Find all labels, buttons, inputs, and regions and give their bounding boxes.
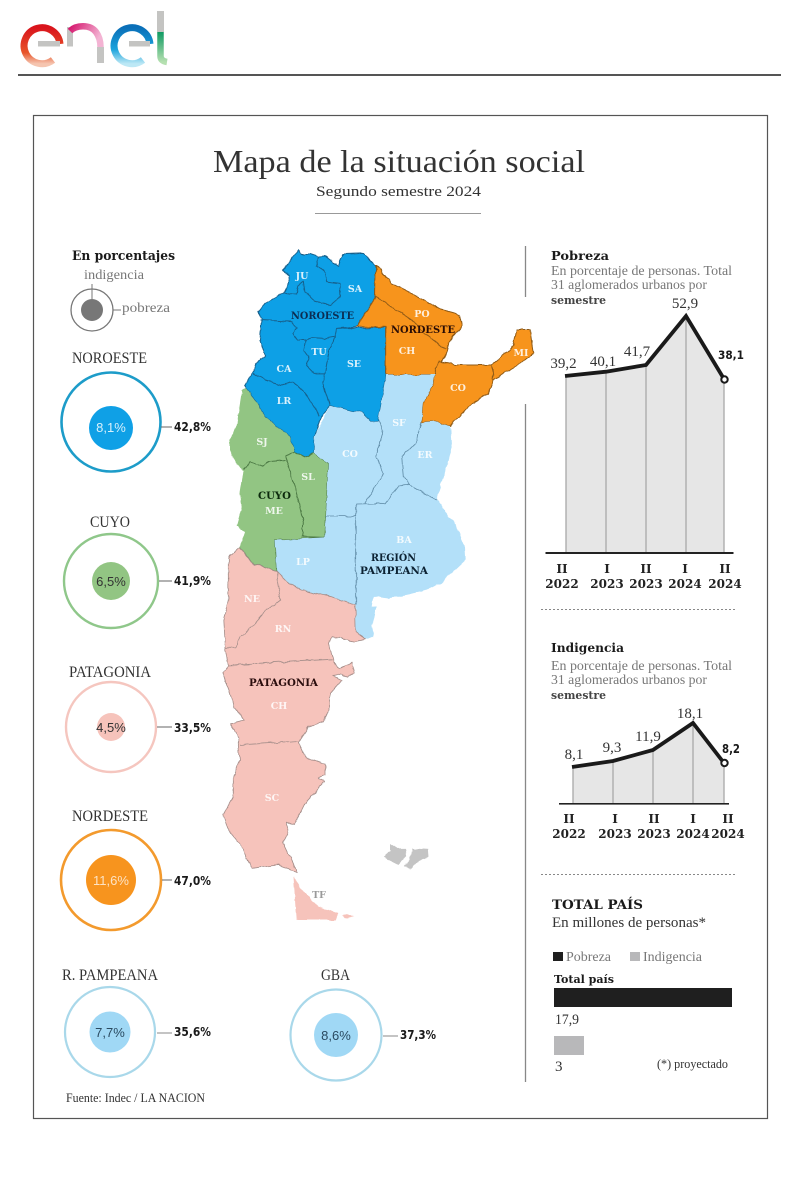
circle: Patagonia: 33,5% — [174, 721, 211, 735]
region names: CUYO — [258, 490, 291, 502]
panel: Total país: (*) proyectado — [657, 1057, 728, 1071]
bar: indigencia — [554, 1036, 584, 1055]
region names: NORDESTE — [391, 324, 455, 336]
panel: Pobreza: En porcentaje de personas. Total — [551, 263, 732, 278]
province labels: SA — [348, 284, 363, 295]
circle: Noroeste: 42,8% — [174, 420, 211, 434]
line chart: indigencia: 2024 — [676, 827, 710, 841]
province labels: CA — [277, 364, 292, 375]
province labels: CH — [271, 701, 287, 712]
circle: Cuyo — [64, 514, 211, 628]
circle: Noroeste: 8,1% — [96, 420, 126, 435]
region names: PATAGONIA — [249, 677, 319, 689]
province labels: LR — [277, 396, 291, 407]
panel: Total país: 17,9 — [555, 1012, 579, 1028]
line chart: pobreza: 2024 — [708, 577, 742, 591]
province labels: SE — [347, 359, 361, 370]
line chart: indigencia: II — [648, 812, 660, 826]
region: Noroeste — [245, 250, 386, 457]
line chart: indigencia — [552, 706, 745, 841]
divider — [541, 608, 735, 610]
title: Mapa de la situación social — [213, 143, 585, 179]
province labels: ME — [265, 506, 283, 517]
region: Nordeste — [357, 265, 533, 426]
province labels: LP — [296, 557, 310, 568]
line chart: pobreza — [545, 296, 744, 591]
province labels: SF — [392, 418, 406, 429]
legend: pobreza / indigencia — [553, 949, 702, 964]
panel: Indigencia — [551, 640, 745, 841]
Islas Malvinas — [383, 844, 429, 868]
region names: NOROESTE — [291, 310, 354, 322]
line chart: pobreza: 38,1 — [718, 348, 744, 362]
panel: Total país: Total país — [554, 972, 614, 986]
region: Cuyo — [230, 388, 328, 572]
line chart: indigencia: II — [563, 812, 575, 826]
circle: Nordeste: NORDESTE — [72, 808, 148, 825]
legend: En porcentajes: En porcentajes — [72, 249, 175, 264]
legend: En porcentajes — [71, 249, 175, 331]
line chart: indigencia: I — [612, 812, 618, 826]
circle: R. Pampeana: 35,6% — [174, 1025, 211, 1039]
line chart: pobreza: 52,9 — [672, 296, 698, 312]
circle: Patagonia: 4,5% — [96, 720, 126, 735]
region names: PAMPEANA — [360, 565, 429, 577]
circle: GBA: 8,6% — [321, 1028, 351, 1043]
panel: Pobreza: 31 aglomerados urbanos por — [551, 277, 708, 292]
subtitle: Segundo semestre 2024 — [316, 184, 482, 200]
panel: Pobreza: Pobreza — [551, 248, 609, 263]
line chart: pobreza: II — [556, 562, 568, 576]
circle: Cuyo: 41,9% — [174, 574, 211, 588]
line chart: indigencia: 2023 — [598, 827, 632, 841]
panel: Indigencia: semestre — [551, 689, 606, 702]
subtitle rule — [315, 212, 481, 214]
legend: En porcentajes: pobreza — [122, 300, 170, 315]
circle: GBA: GBA — [321, 967, 350, 984]
province labels: CH — [399, 346, 415, 357]
line chart: indigencia: 8,2 — [722, 742, 740, 756]
province labels: SL — [301, 472, 315, 483]
line chart: pobreza: II — [719, 562, 731, 576]
province labels: SJ — [256, 437, 268, 448]
circle: Patagonia — [66, 664, 211, 772]
panel: Indigencia: En porcentaje de personas. Total — [551, 658, 732, 673]
circle: Nordeste: 47,0% — [174, 874, 211, 888]
panel: Indigencia: 31 aglomerados urbanos por — [551, 672, 708, 687]
region: Pampeana — [275, 375, 466, 639]
legend: En porcentajes: indigencia — [84, 267, 144, 282]
vertical separator — [524, 246, 526, 1082]
province labels: PO — [414, 309, 430, 320]
panel: Pobreza: semestre — [551, 294, 606, 307]
line chart: pobreza: 39,2 — [550, 356, 577, 372]
line chart: pobreza: 2023 — [590, 577, 624, 591]
line chart: indigencia: 18,1 — [677, 706, 703, 722]
line chart: pobreza: 2023 — [629, 577, 663, 591]
logo: enel — [24, 11, 167, 64]
circle: R. Pampeana — [62, 967, 211, 1077]
circle: Noroeste: NOROESTE — [72, 350, 147, 367]
region names — [249, 310, 455, 689]
province labels: CO — [450, 383, 466, 394]
map regions — [222, 250, 533, 920]
panel: Total país: 3 — [555, 1059, 562, 1075]
line chart: indigencia: 9,3 — [603, 740, 621, 756]
circle: Nordeste — [61, 808, 211, 930]
panel: Total país: En millones de personas* — [552, 915, 706, 931]
line chart: indigencia: 2024 — [711, 827, 745, 841]
line chart: indigencia: II — [722, 812, 734, 826]
province labels: TU — [311, 347, 327, 358]
line chart: pobreza: I — [682, 562, 688, 576]
map of Argentina — [222, 250, 533, 920]
line chart: pobreza: 40,1 — [590, 354, 616, 370]
province labels: JU — [295, 271, 309, 282]
line chart: pobreza: 2022 — [545, 577, 579, 591]
line chart: pobreza: 41,7 — [624, 344, 651, 360]
line chart: indigencia: 8,1 — [565, 747, 583, 763]
line chart: indigencia: 2022 — [552, 827, 586, 841]
Tierra del Fuego — [294, 876, 355, 920]
infographic frame — [34, 116, 768, 1118]
bar: pobreza — [554, 988, 732, 1007]
circle: R. Pampeana: 7,7% — [95, 1025, 125, 1040]
province labels: NE — [244, 594, 260, 605]
province labels: TF — [312, 890, 326, 901]
divider — [541, 874, 735, 876]
province labels: CO — [342, 449, 358, 460]
circle: Cuyo: 6,5% — [96, 574, 126, 589]
circle: R. Pampeana: R. PAMPEANA — [62, 967, 158, 984]
panel: Pobreza — [545, 248, 744, 591]
panel: Indigencia: Indigencia — [551, 640, 624, 655]
source note: Fuente: Indec / LA NACION — [66, 1091, 205, 1105]
circle: GBA — [290, 967, 436, 1080]
circle: Noroeste — [62, 350, 211, 472]
region names: REGIÓN — [371, 550, 416, 564]
line chart: pobreza: I — [604, 562, 610, 576]
province labels: SC — [265, 793, 280, 804]
legend: pobreza / indigencia: Pobreza — [566, 949, 611, 964]
panel: Total país — [552, 897, 732, 1075]
line chart: pobreza: II — [640, 562, 652, 576]
panel: Total país: TOTAL PAÍS — [552, 897, 643, 913]
line chart: pobreza: 2024 — [668, 577, 702, 591]
province labels — [244, 271, 529, 901]
province labels: BA — [396, 535, 412, 546]
header rule — [18, 74, 781, 76]
line chart: indigencia: I — [690, 812, 696, 826]
legend: pobreza / indigencia: Indigencia — [643, 949, 702, 964]
line chart: indigencia: 11,9 — [635, 729, 661, 745]
province labels: MI — [514, 348, 529, 359]
province labels: RN — [275, 624, 292, 635]
circle: Patagonia: PATAGONIA — [69, 664, 151, 681]
circle: GBA: 37,3% — [400, 1028, 436, 1042]
region: Patagonia — [222, 547, 367, 872]
circle: Cuyo: CUYO — [90, 514, 130, 531]
circle: Nordeste: 11,6% — [93, 873, 129, 888]
province labels: ER — [417, 450, 433, 461]
line chart: indigencia: 2023 — [637, 827, 671, 841]
